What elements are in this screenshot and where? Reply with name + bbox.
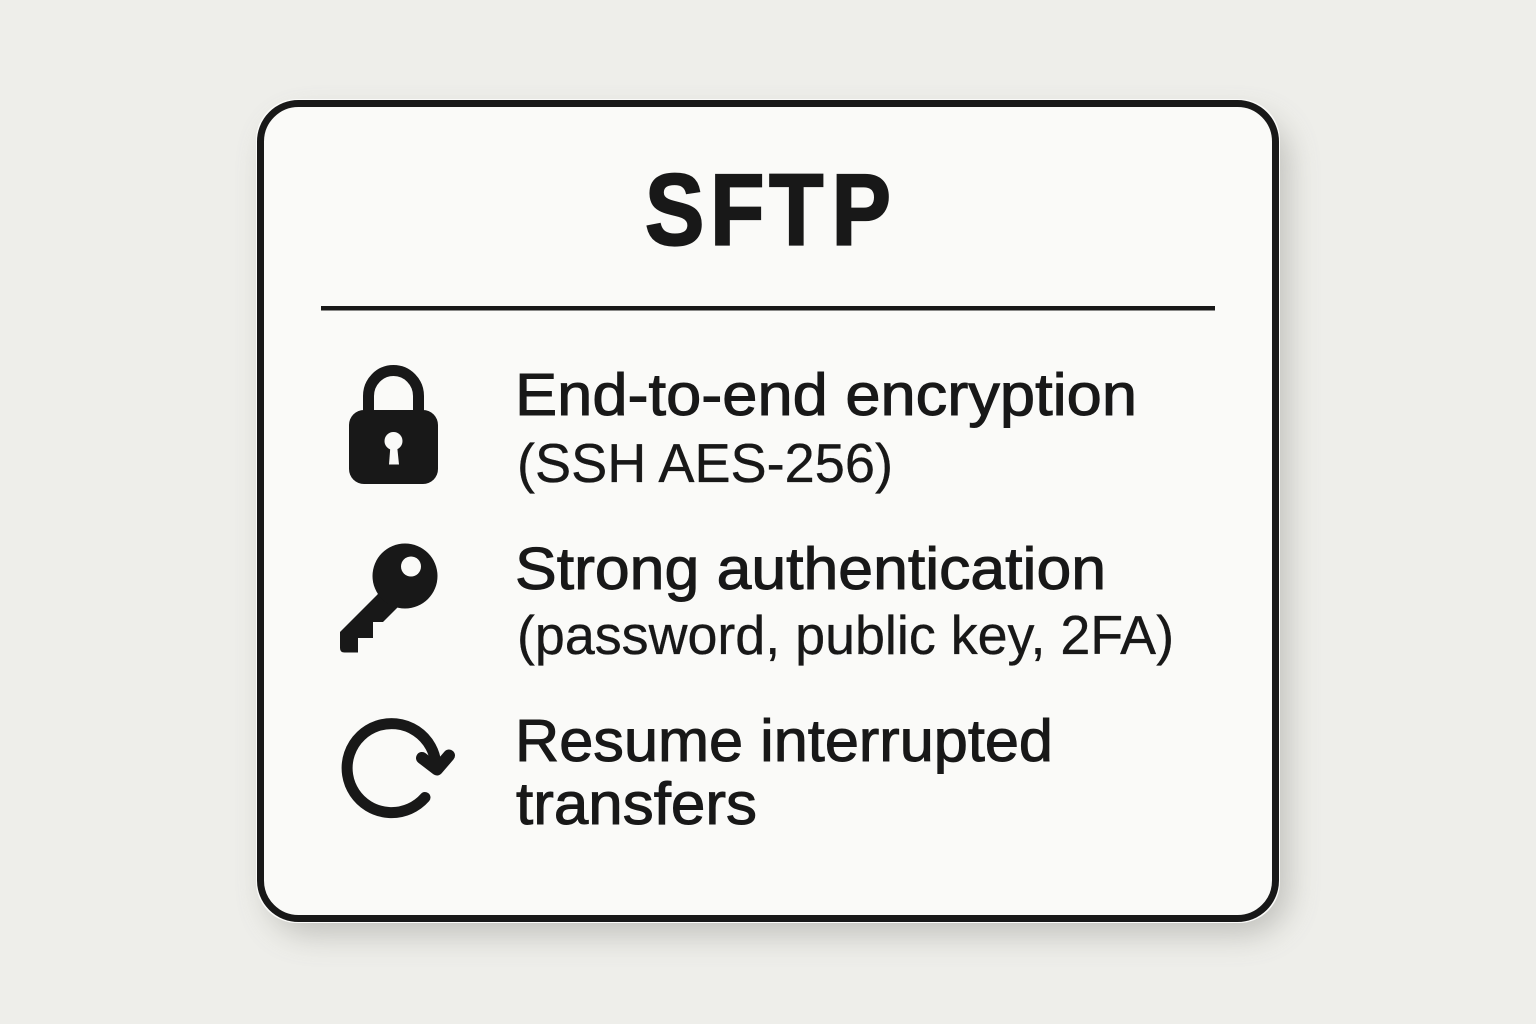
icon: padlock — [349, 370, 438, 484]
icon: key — [340, 544, 438, 652]
text: encryption heading: End-to-end encryption — [515, 362, 1137, 428]
icon: circular arrow — [347, 724, 449, 813]
title: SFTP — [645, 154, 891, 267]
feature: resume — [347, 708, 1053, 837]
feature: encryption — [349, 362, 1137, 494]
feature: authentication — [340, 536, 1174, 666]
text: authentication heading: Strong authentication — [515, 536, 1106, 602]
panel: SFTP card — [256, 99, 1280, 923]
text: resume heading line 1: Resume interrupted — [515, 708, 1053, 774]
text: resume heading line 2: transfers — [516, 771, 757, 837]
text: authentication detail: (password, public key, 2FA) — [517, 604, 1174, 666]
text: encryption detail: (SSH AES-256) — [517, 432, 893, 494]
